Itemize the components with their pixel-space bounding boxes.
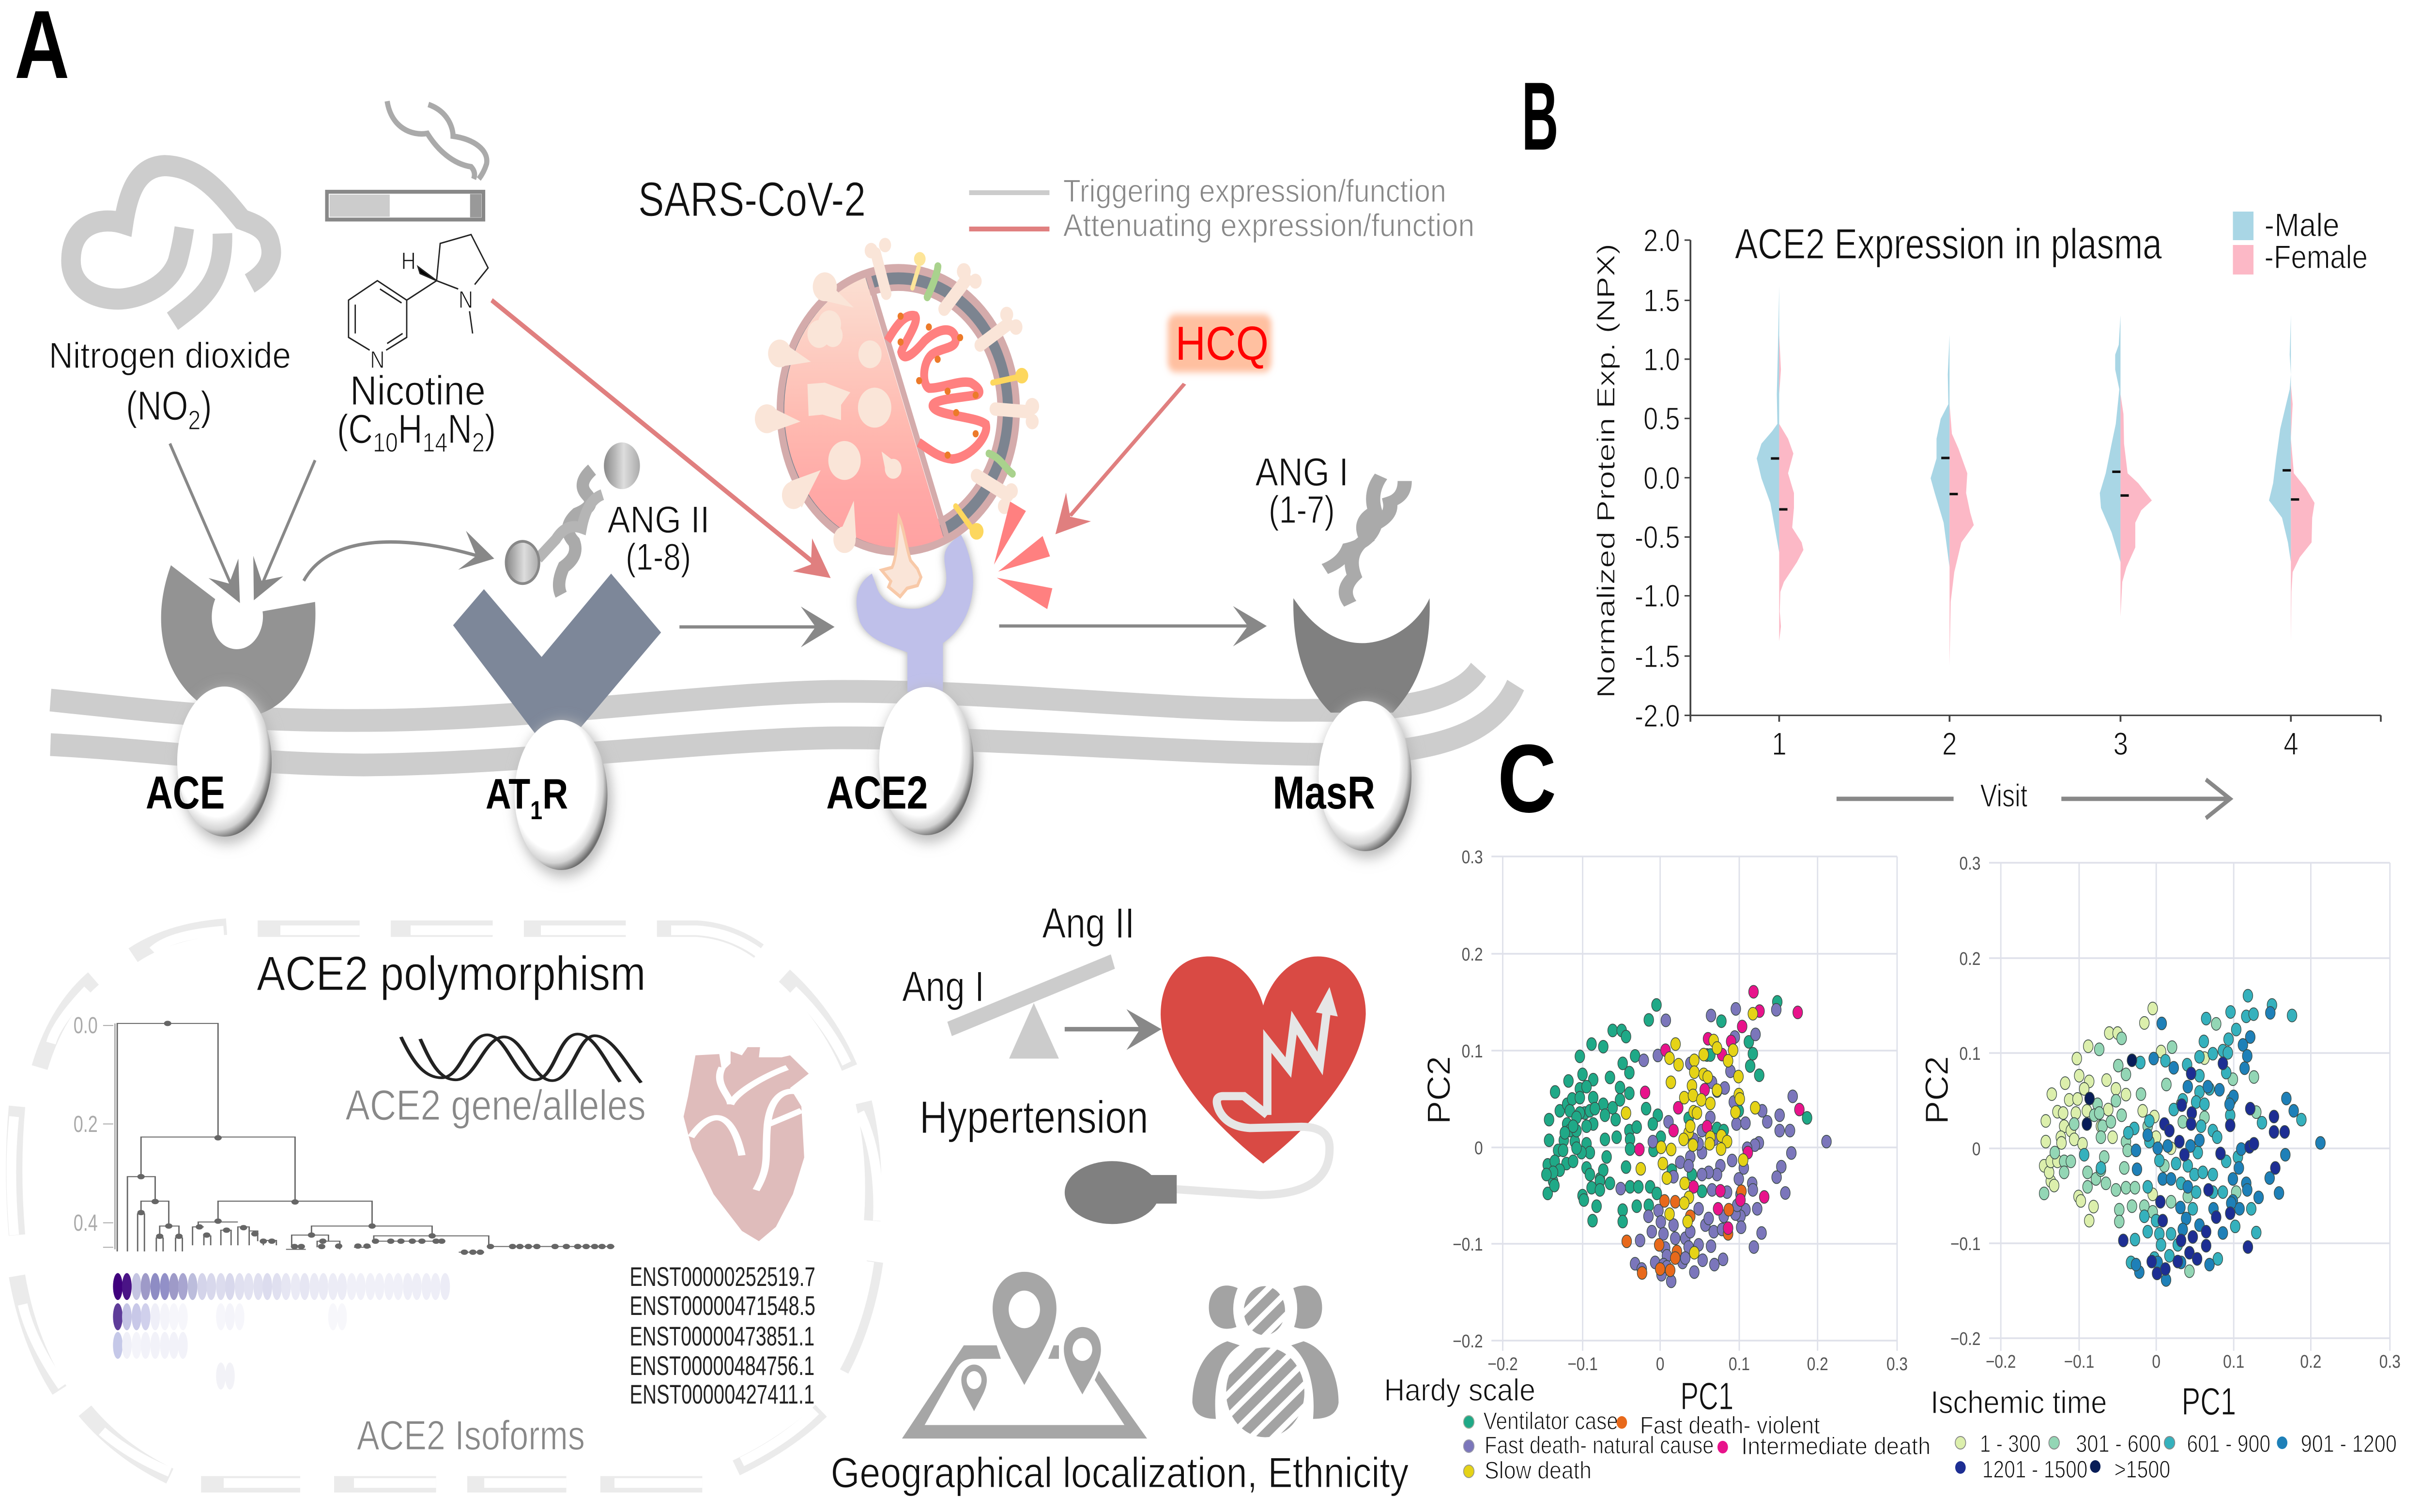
legend: Hardy scale: Fast death- natural cause	[1485, 1431, 1714, 1459]
y axis labels: -2.0	[1635, 698, 1680, 733]
x axis labels: 2	[1942, 726, 1957, 762]
legend: Hardy scale: Ventilator case	[1484, 1407, 1618, 1435]
nicotine chemical structure: N	[459, 286, 473, 313]
label: nicotine formula: H	[398, 407, 422, 452]
y tick labels: −0.1	[1453, 1234, 1483, 1255]
isoform transcript IDs: ENST00000473851.1	[629, 1321, 814, 1351]
legend: sex: -Female	[2265, 239, 2368, 275]
axis label: PC2 right: PC2	[1918, 1056, 1955, 1124]
y axis labels: 2.0	[1643, 223, 1680, 258]
isoform heat map	[113, 1273, 450, 1390]
label: nicotine formula: 2	[472, 427, 485, 458]
y tick labels: 0.1	[1462, 1041, 1483, 1062]
violin: visit 4	[2269, 315, 2314, 641]
scatter plot: ischemic time	[1950, 853, 2401, 1372]
x tick labels: 0	[2152, 1351, 2161, 1372]
label: ACE2: ACE2	[826, 766, 928, 819]
y tick labels: 0.2	[1959, 948, 1981, 969]
AT1R receptor	[453, 574, 661, 748]
scatter plot: Hardy scale	[1453, 847, 1908, 1375]
x tick labels: 0.3	[2379, 1351, 2401, 1372]
y tick labels: −0.2	[1453, 1331, 1483, 1352]
legend: Hardy scale: Intermediate death	[1741, 1432, 1931, 1460]
nicotine chemical structure	[349, 234, 488, 373]
x tick labels: −0.2	[1487, 1354, 1518, 1375]
label: ANG II: ANG II	[608, 499, 709, 541]
panel B: ACE2 expression in plasma	[1522, 62, 2381, 818]
y axis labels	[1635, 223, 1680, 733]
label: NO2 formula: )	[200, 383, 212, 428]
label: ANG II residues: (1-8)	[626, 536, 691, 578]
transmembrane domain: ACE	[177, 687, 276, 843]
x axis labels: 3	[2113, 726, 2128, 762]
dendrogram axis labels: 0.0	[74, 1013, 98, 1039]
label: SARS-CoV-2: SARS-CoV-2	[638, 172, 866, 227]
spike docked in ACE2	[882, 518, 921, 596]
label: MasR: MasR	[1272, 766, 1375, 819]
grid	[1491, 856, 1897, 1351]
transmembrane domain: ACE2	[879, 687, 978, 842]
icon: balance seesaw	[947, 954, 1115, 1058]
y tick labels: 0.2	[1462, 944, 1483, 965]
label: geography and ethnicity: Geographical localization, Ethnicity	[831, 1450, 1409, 1497]
isoform transcript IDs: ENST00000252519.7	[629, 1261, 815, 1292]
x tick labels	[1986, 1351, 2401, 1372]
x tick labels: 0.3	[1886, 1354, 1908, 1375]
label: ANG I: ANG I	[1256, 450, 1348, 494]
label: NO2 formula: 2	[188, 405, 200, 435]
isoform transcript IDs	[629, 1261, 815, 1409]
x axis labels: 1	[1772, 726, 1787, 762]
inhibition burst	[994, 502, 1052, 609]
nicotine chemical structure: H	[401, 247, 416, 275]
chart axes	[1685, 240, 2381, 722]
viral RNA	[888, 313, 986, 459]
y axis labels: 0.0	[1643, 460, 1680, 496]
arrow ACE2 to MasR	[999, 606, 1267, 646]
y axis title: Normalized Protein Exp. (NPX)	[1592, 244, 1620, 698]
legend: line meanings: Triggering expression/function	[1063, 173, 1446, 209]
icon: DNA strands	[401, 1034, 641, 1083]
y axis labels: -1.5	[1635, 639, 1680, 674]
legend: ischemic time: 1201 - 1500	[1982, 1455, 2087, 1483]
points	[1542, 985, 1831, 1288]
axis label: PC1 left: PC1	[1680, 1374, 1733, 1418]
x tick labels: −0.1	[2064, 1351, 2094, 1372]
label: nitrogen dioxide: Nitrogen dioxide	[49, 335, 291, 376]
legend: sex	[2233, 207, 2368, 275]
dendrogram axis labels: 0.2	[74, 1112, 98, 1137]
icon: map with location pins	[902, 1272, 1147, 1438]
isoform transcript IDs: ENST00000427411.1	[629, 1379, 814, 1409]
y tick labels	[1950, 853, 1981, 1349]
legend: ischemic time: >1500	[2114, 1455, 2170, 1483]
x axis title: Visit: Visit	[1980, 778, 2027, 813]
ANG I peptide	[1325, 476, 1405, 604]
legend: ischemic time: 301 - 600	[2076, 1430, 2161, 1457]
dendrogram	[103, 1021, 614, 1255]
axis label: PC1 right: PC1	[2182, 1379, 2236, 1423]
y axis labels: 1.0	[1643, 342, 1680, 377]
label: AT1R: R	[542, 771, 568, 818]
panel letter C: C	[1498, 725, 1556, 833]
label: ACE2 gene/alleles: ACE2 gene/alleles	[346, 1082, 646, 1130]
y tick labels: 0.3	[1462, 847, 1483, 868]
spike proteins	[755, 238, 1039, 553]
y axis labels: 0.5	[1643, 401, 1680, 436]
chart title: ACE2 Expression in plasma	[1735, 221, 2162, 268]
label: nicotine formula: (C	[337, 407, 373, 452]
ANG II peptide	[506, 443, 640, 595]
isoform transcript IDs: ENST00000484756.1	[629, 1350, 814, 1381]
label: nicotine formula: 14	[422, 427, 447, 458]
panel letter B: B	[1522, 62, 1559, 170]
legend: sex: -Male	[2265, 207, 2340, 244]
x axis labels: 4	[2283, 726, 2298, 762]
x tick labels: 0.2	[2300, 1351, 2321, 1372]
arrow nicotine to ACE2	[491, 300, 831, 578]
x tick labels: 0.1	[2223, 1351, 2244, 1372]
arrows into ACE	[170, 443, 315, 603]
arrow: visit direction	[1837, 779, 2230, 818]
transmembrane domain: AT1R	[515, 720, 612, 877]
SARS-CoV-2 virus	[755, 238, 1039, 596]
MasR receptor	[1293, 598, 1430, 713]
panel: hypertension	[831, 900, 1409, 1497]
x tick labels: 0	[1656, 1354, 1664, 1375]
x tick labels: −0.1	[1567, 1354, 1598, 1375]
nicotine chemical structure: N	[370, 346, 385, 373]
icon: anatomical heart	[684, 1047, 809, 1241]
y axis labels: 1.5	[1643, 283, 1680, 318]
label: HCQ: HCQ	[1175, 317, 1269, 370]
legend: ischemic time	[1955, 1430, 2397, 1483]
y tick labels: 0.1	[1959, 1043, 1981, 1064]
legend: ischemic time: 901 - 1200	[2301, 1430, 2397, 1457]
dendrogram axis labels	[74, 1013, 98, 1236]
y axis labels: -1.0	[1635, 578, 1680, 613]
dashed cell outline	[11, 927, 878, 1484]
y tick labels: 0	[1474, 1138, 1483, 1159]
x tick labels: 0.2	[1807, 1354, 1828, 1375]
label: AT1R: AT	[486, 771, 530, 818]
label: NO2 formula: (NO	[126, 383, 188, 428]
icon: heart with blood pressure cuff	[1065, 957, 1366, 1224]
arrow AT1R to ACE2	[679, 607, 835, 647]
label: Ang I: Ang I	[902, 963, 984, 1011]
label: nicotine formula: )	[485, 407, 496, 452]
label: nicotine: Nicotine	[350, 367, 486, 413]
label: ACE2 isoforms: ACE2 Isoforms	[357, 1412, 585, 1458]
icon: NO2 cloud	[71, 166, 271, 321]
x tick labels: −0.2	[1986, 1351, 2016, 1372]
arrow from HCQ	[1056, 384, 1184, 535]
panel A: renin-angiotensin pathway	[15, 0, 1516, 877]
label: nicotine formula: N	[447, 407, 472, 452]
legend: Hardy scale: Fast death- violent	[1640, 1411, 1820, 1439]
ACE2 receptor	[857, 535, 973, 692]
x axis labels	[1772, 726, 2298, 762]
violin: visit 3	[2100, 315, 2152, 616]
legend: Hardy scale: Slow death	[1485, 1456, 1592, 1484]
y tick labels	[1453, 847, 1483, 1352]
legend title: ischemic time: Ischemic time	[1931, 1384, 2107, 1420]
isoform transcript IDs: ENST00000471548.5	[629, 1290, 815, 1321]
legend: ischemic time: 1 - 300	[1980, 1430, 2041, 1457]
panel C: PCA plots	[1384, 725, 2401, 1484]
label: AT1R: 1	[530, 795, 542, 825]
grid	[1989, 863, 2390, 1351]
axis label: PC2 left: PC2	[1421, 1056, 1457, 1124]
y axis labels: -0.5	[1635, 519, 1680, 555]
curved arrow ACE to ANG II	[304, 531, 494, 581]
y tick labels: 0	[1972, 1139, 1981, 1160]
label: ACE: ACE	[146, 766, 225, 819]
panel: ACE2 polymorphism	[11, 927, 878, 1484]
legend: ischemic time: 601 - 900	[2187, 1430, 2270, 1457]
legend: Hardy scale	[1464, 1407, 1931, 1484]
points	[2039, 989, 2325, 1286]
title: ACE2 polymorphism: ACE2 polymorphism	[257, 947, 646, 1001]
violin: visit 1	[1757, 286, 1804, 641]
label: nicotine formula: 10	[373, 427, 398, 458]
glycoproteins	[912, 252, 1028, 540]
y tick labels: 0.3	[1959, 853, 1981, 874]
y tick labels: −0.1	[1950, 1234, 1981, 1254]
label: Ang II: Ang II	[1042, 900, 1134, 947]
violin: visit 2	[1931, 335, 1974, 666]
icon: ethnic group people	[1193, 1285, 1339, 1437]
label: Hypertension: Hypertension	[919, 1091, 1149, 1143]
legend title: Hardy scale: Hardy scale	[1384, 1374, 1535, 1407]
x tick labels: 0.1	[1729, 1354, 1750, 1375]
label: ANG I residues: (1-7)	[1269, 488, 1335, 531]
ACE enzyme	[161, 565, 315, 717]
transmembrane domain: MasR	[1318, 701, 1416, 858]
arrow seesaw to heart	[1065, 1009, 1162, 1050]
dendrogram axis labels: 0.4	[74, 1210, 98, 1236]
y tick labels: −0.2	[1950, 1329, 1981, 1349]
legend: line meanings: Attenuating expression/function	[1063, 207, 1474, 243]
cell membrane	[50, 670, 1516, 765]
legend: line meanings	[969, 173, 1474, 243]
x tick labels	[1487, 1354, 1908, 1375]
icon: cigarette with smoke	[327, 101, 487, 219]
